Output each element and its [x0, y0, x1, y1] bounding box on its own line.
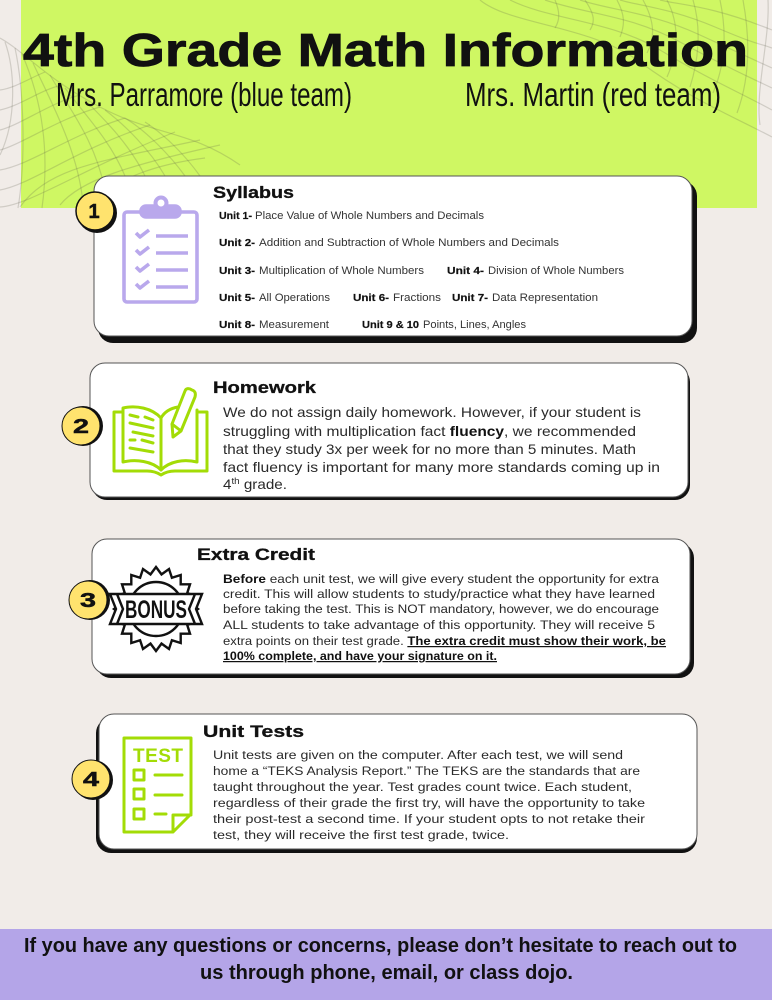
badge 4: 4	[83, 769, 100, 791]
unit tests text: test, they will receive the first test grade, twice.	[213, 828, 509, 842]
panel: extra credit	[69, 539, 694, 678]
background grid pattern	[0, 0, 772, 208]
panel: homework	[62, 363, 690, 500]
unit list: Unit 1-	[219, 210, 253, 222]
icon: clipboard	[124, 198, 197, 302]
unit tests text	[213, 748, 645, 842]
badge 4	[72, 760, 113, 800]
unit list: Unit 4-	[447, 265, 485, 277]
icon: open book and pencil	[114, 389, 207, 475]
test label: TEST	[133, 746, 183, 767]
unit list: Unit 7-	[452, 292, 489, 304]
unit list: Data Representation	[492, 292, 598, 304]
panel: syllabus	[76, 176, 697, 343]
unit list: Addition and Subtraction of Whole Numbers and Decimals	[259, 237, 560, 249]
bonus label: BONUS	[125, 596, 187, 624]
title: 4th Grade Math Information	[23, 24, 748, 76]
extra credit text: ALL students to take advantage of this opportunity. They will receive 5	[223, 618, 655, 632]
extra credit text: credit. This will allow students to study/practice what they have learned	[223, 587, 655, 601]
heading: unit tests: Unit Tests	[203, 722, 304, 741]
heading: extra credit: Extra Credit	[197, 545, 315, 564]
extra credit text: extra points on their test grade. The extra credit must show their work, be	[223, 634, 666, 648]
badge 2	[62, 406, 103, 446]
green header panel	[21, 0, 757, 208]
unit list: Place Value of Whole Numbers and Decimals	[255, 210, 485, 222]
unit list: Multiplication of Whole Numbers	[259, 265, 425, 277]
unit tests text: regardless of their grade the first try, will have the opportunity to take	[213, 796, 645, 810]
homework text: 4	[223, 476, 231, 492]
homework text: that they study 3x per week for no more than 5 minutes. Math	[223, 441, 636, 457]
footer banner: us through phone, email, or class dojo.	[200, 962, 573, 984]
unit list: Unit 8-	[219, 319, 256, 331]
unit list: Unit 6-	[353, 292, 390, 304]
unit list	[219, 210, 625, 331]
footer banner	[0, 929, 772, 1000]
badge 2: 2	[73, 416, 89, 438]
extra credit text: before taking the test. This is NOT mandatory, however, we do encourage	[223, 602, 659, 616]
homework text: grade.	[240, 476, 287, 492]
homework text: We do not assign daily homework. However, if your student is	[223, 404, 641, 420]
unit tests text: Unit tests are given on the computer. After each test, we will send	[213, 748, 623, 762]
homework text	[223, 404, 660, 492]
badge 1	[76, 192, 117, 233]
unit list: All Operations	[259, 292, 331, 304]
extra credit text	[223, 572, 666, 663]
teacher name: blue team: Mrs. Parramore (blue team)	[56, 76, 352, 113]
footer banner: If you have any questions or concerns, please don’t hesitate to reach out to	[24, 935, 737, 957]
icon: bonus seal	[110, 567, 202, 651]
extra credit text: 100% complete, and have your signature on it.	[223, 649, 497, 663]
unit tests text: taught throughout the year. Test grades count twice. Each student,	[213, 780, 632, 794]
unit list: Unit 9 & 10	[362, 319, 419, 331]
extra credit text: Before each unit test, we will give every student the opportunity for extra	[223, 572, 659, 586]
homework text: struggling with multiplication fact fluency , we recommended	[223, 423, 636, 439]
icon: test paper	[124, 738, 191, 832]
badge 1: 1	[88, 201, 100, 223]
panel: unit tests	[72, 714, 697, 853]
heading: syllabus: Syllabus	[213, 183, 294, 202]
homework text: fact fluency is important for many more standards coming up in	[223, 459, 660, 475]
unit list: Unit 3-	[219, 265, 256, 277]
unit list: Unit 5-	[219, 292, 256, 304]
unit list: Unit 2-	[219, 237, 256, 249]
unit tests text: home a “TEKS Analysis Report.” The TEKS are the standards that are	[213, 764, 640, 778]
homework text: th	[231, 476, 240, 486]
unit tests text: their post-test a second time. If your student opts to not retake their	[213, 812, 645, 826]
badge 3: 3	[80, 590, 96, 612]
heading: homework: Homework	[213, 378, 317, 397]
unit list: Division of Whole Numbers	[488, 265, 625, 277]
unit list: Fractions	[393, 292, 442, 304]
badge 3	[69, 580, 110, 620]
unit list: Measurement	[259, 319, 329, 331]
unit list: Points, Lines, Angles	[423, 319, 526, 331]
